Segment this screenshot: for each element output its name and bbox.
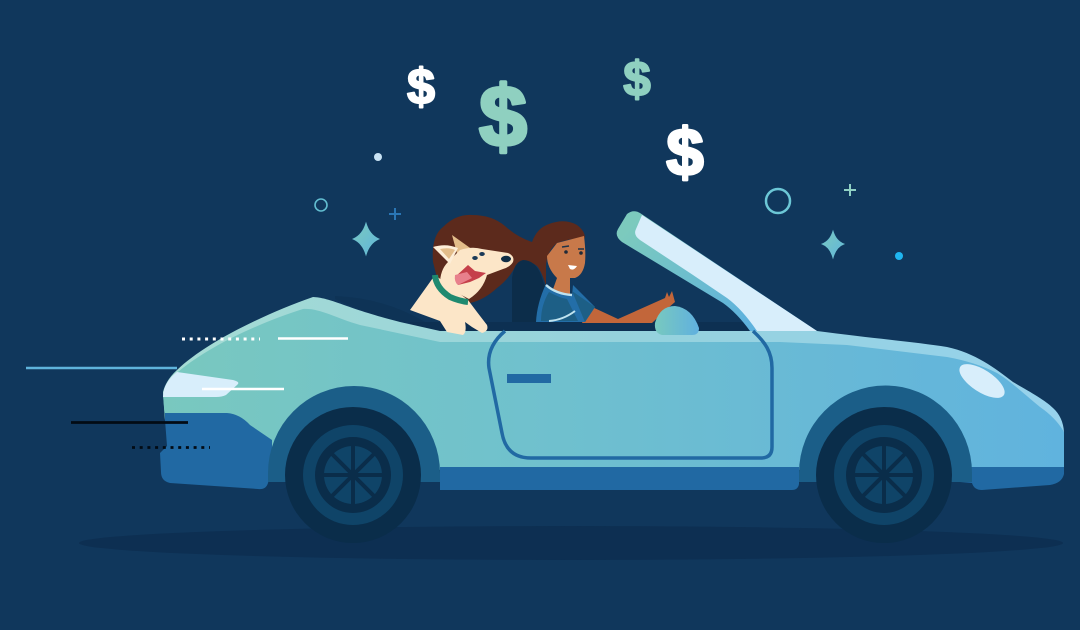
front hub (846, 437, 922, 513)
front tire (816, 407, 952, 543)
front wheel (799, 385, 972, 543)
rear hub (315, 437, 391, 513)
speed line: white dotted (182, 338, 260, 340)
dog collar (435, 275, 468, 302)
rear tire (285, 407, 421, 543)
shirt sleeve band (549, 311, 575, 321)
dog tongue (455, 272, 472, 285)
ring: small (315, 199, 327, 211)
ground shadow (79, 526, 1063, 560)
plus: blue (389, 208, 401, 220)
driver (512, 236, 675, 323)
dog eye far (479, 252, 485, 256)
shirt shading (541, 292, 578, 321)
driver eye (564, 250, 568, 254)
speed line: white upper (278, 337, 348, 340)
dog inner ear (440, 248, 455, 259)
rear bumper (160, 413, 272, 489)
speed line: white lower (202, 388, 284, 390)
rear wheel (268, 386, 440, 543)
cockpit floor (410, 322, 760, 332)
sparkle: left (353, 223, 379, 255)
front spokes (854, 445, 914, 505)
sparkle: right (822, 231, 844, 258)
dog (410, 235, 513, 335)
driver arm (582, 291, 675, 323)
dog mouth (455, 265, 486, 285)
dog back ear (452, 235, 473, 257)
door outline (489, 331, 772, 458)
dot: pale (374, 153, 382, 161)
rear rim (303, 425, 403, 525)
door handle (507, 374, 551, 383)
dog eye near (472, 256, 478, 260)
front bumper (960, 467, 1064, 490)
dog head (440, 248, 513, 299)
rear wheel face (324, 446, 382, 504)
car seat (512, 260, 546, 322)
shirt collar (546, 285, 572, 295)
driver brows (562, 246, 584, 249)
dot: bright blue (895, 252, 903, 260)
speed lines (26, 338, 348, 448)
driver shirt (536, 284, 595, 322)
side sill (440, 467, 799, 490)
speed line: black (71, 421, 188, 424)
dollar sign: small teal: $ (623, 53, 651, 107)
dog body and paws (410, 275, 487, 335)
dollar sign: small white: $ (407, 59, 435, 115)
flowing hair (433, 215, 585, 303)
front rim (834, 425, 934, 525)
plus: teal (844, 184, 856, 196)
windshield (617, 211, 817, 331)
dollar sign: medium white: $ (666, 115, 704, 190)
dollar sign: large teal: $ (479, 69, 527, 165)
car body (160, 297, 1064, 490)
shirt right panel (572, 291, 595, 322)
side mirror (655, 306, 699, 335)
front headlight (954, 358, 1010, 404)
body main surface (163, 309, 1064, 470)
driver neck and face (547, 236, 585, 296)
rear light (163, 372, 238, 397)
rear wheel arch (268, 386, 440, 482)
rear spokes (323, 445, 383, 505)
speed line: black dotted (132, 446, 210, 449)
dog front ear (433, 245, 458, 264)
driver far eye (579, 251, 583, 255)
front wheel face (855, 446, 913, 504)
front wheel arch (799, 385, 972, 482)
dog nose (501, 256, 511, 262)
trunk shadow (335, 296, 425, 323)
body upper band (163, 297, 1064, 470)
ring: large (766, 189, 790, 213)
driver smile (568, 265, 577, 270)
speed line: blue (26, 367, 177, 369)
